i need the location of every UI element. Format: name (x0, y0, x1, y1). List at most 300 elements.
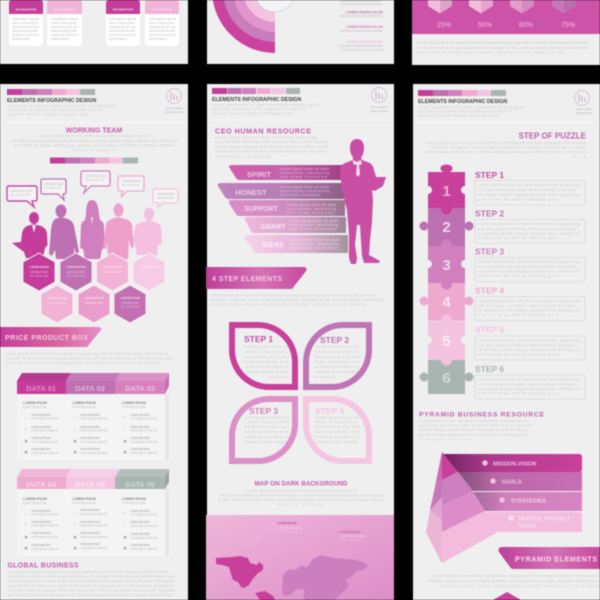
price box: data 03: LOREM IPSUM (122, 401, 146, 405)
cube 50% (469, 0, 493, 29)
puzzle step 5 text: ut laoreet dolore magna aliquam erat volutpat ut (478, 348, 580, 352)
steps intro: Lorem ipsum dolor sit amet consectetur adipiscing elit sed diam nonummy nibh euismod (210, 294, 375, 298)
band: support: Lorem ipsum dolor sit amet (287, 203, 336, 207)
card: information 1: euismod tincidunt (12, 33, 39, 37)
price box: data 06: Lorem ipsum dolor sit (130, 524, 157, 528)
price box: data 03: YOUR SUB TEXT (130, 448, 151, 451)
puzzle step 6 text (475, 364, 585, 399)
price box: data 02: ✕ (73, 450, 77, 456)
CEO text: dolore magna aliquam erat volutpat ut wisi enim ad minim (215, 145, 328, 149)
puzzle step 5 text: Lorem ipsum dolor sit amet consectetur adipiscing (478, 338, 580, 342)
price box: data 04 (17, 469, 71, 556)
hexagon 6: Lorem ipsum dolor (85, 301, 104, 305)
band: support (229, 200, 345, 216)
price box: data 01: Lorem ipsum dolor sit (31, 440, 58, 444)
speech bubble 5: sit amet elit (157, 196, 173, 200)
price box: data 05: Lorem ipsum dolor sit (80, 512, 107, 516)
puzzle step 5 text: wisi enim ad minim veniam quis (478, 352, 558, 356)
price box: data 01: DATA 01 (26, 384, 56, 393)
band: smart (245, 217, 346, 233)
map text: nisl ut aliquip (278, 502, 323, 506)
hexagon 3: LOREM IPSUM (103, 265, 123, 269)
step 1 petal: Lorem ipsum dolor sit (244, 345, 288, 349)
hexagon 4: LOREM IPSUM (139, 265, 160, 269)
CEO text: lobortis nisl ut aliquip (215, 154, 270, 158)
step 3 petal: Lorem ipsum dolor sit (246, 416, 289, 420)
panel: top right percent cubes (412, 0, 600, 65)
price box: data 04: Lorem ipsum dolor sit (31, 547, 58, 551)
price box: data 04: YOUR SUB TEXT (31, 521, 52, 524)
global business text: tincidunt ut laoreet dolore magna aliquam erat volutpat ut wisi enim ad minim veniam quis (8, 574, 175, 578)
puzzle step 2 text: Lorem ipsum dolor sit amet consectetur adipiscing (478, 222, 580, 226)
step 1 petal: euismod tincidunt ut (246, 365, 289, 369)
band: honest: HONEST (235, 188, 267, 197)
band: spirit (229, 165, 342, 180)
puzzle step 2 text: ut laoreet dolore magna aliquam erat volutpat ut (478, 232, 580, 236)
step 2 petal: Lorem ipsum dolor sit (315, 345, 359, 349)
header text: laoreet dolore magna aliquam erat (212, 112, 292, 116)
puzzle step 4 text: wisi enim ad minim veniam quis (478, 313, 558, 317)
puzzle step 2 text: wisi enim ad minim veniam quis (478, 236, 558, 240)
price box: data 06: ✕ (123, 546, 127, 552)
puzzle step 4 text: elit sed diam nonummy nibh euismod tincidunt (478, 304, 576, 308)
puzzle piece 2 (420, 208, 474, 246)
banner: pyramid elements (498, 547, 600, 569)
panel: top middle semicircle chart (207, 0, 394, 64)
pyramid text: suscipit lobortis (419, 438, 471, 442)
cube 75%: 75% (561, 22, 575, 29)
card: information 3: Lorem ipsum dolor sit (109, 17, 136, 21)
banner: 4 step elements (206, 267, 307, 289)
step 2 petal: laoreet dolore magna (315, 370, 358, 374)
price box: data 04: Lorem ipsum dolor sit (31, 512, 58, 516)
steps intro: nostrud exerci tation ullamcorper suscipit lobortis nisl ut aliquip (210, 302, 365, 306)
legend text: LOREM IPSUM DOLOR (346, 25, 384, 29)
puzzle piece 6 (420, 360, 474, 394)
price box: data 01: ✓ (24, 427, 28, 433)
hexagon 7: sit amet elit (121, 305, 139, 309)
header text: sed diam nonummy nibh euismod tincidunt ut (418, 110, 512, 114)
puzzle step 1 text: ut laoreet dolore magna aliquam erat volutpat ut (478, 193, 580, 197)
card: information 4: amet consectetur (149, 21, 176, 25)
global business text: Lorem ipsum dolor sit amet consectetur adipiscing elit sed diam nonummy nibh euismod (8, 570, 168, 574)
hexagon 6 (78, 285, 110, 323)
header text: Lorem ipsum dolor sit amet consectetur adipiscing elit (418, 106, 526, 110)
steps intro (210, 294, 385, 306)
price box: data 06: DATA 06 (125, 480, 155, 489)
price box: data 01: ✕ (24, 450, 28, 456)
price box: data 02: YOUR SUB TEXT (80, 437, 101, 440)
header text (212, 103, 320, 116)
price box: data 05: ✕ (73, 535, 77, 541)
price box: data 06: YOUR SUB TEXT (130, 510, 151, 513)
price box: data 01: Lorem ipsum dolor sit (31, 451, 58, 455)
price box: data 05: YOUR SUB TEXT (80, 532, 101, 535)
pyramid elements text (428, 574, 598, 588)
hexagon 5 (41, 285, 73, 323)
heading: map on dark background: MAP ON DARK BACKGROUND (255, 480, 348, 488)
puzzle step 3 text: ut laoreet dolore magna aliquam erat volutpat ut (478, 270, 580, 274)
pyramid band: mission vision (442, 454, 582, 472)
band: smart: Lorem ipsum dolor sit amet (289, 219, 338, 223)
step 1 petal: amet consectetur (246, 350, 290, 354)
header title: ELEMENTS INFOGRAPHIC DESIGN (7, 98, 96, 104)
logo: Lorem ipsum (576, 107, 593, 111)
header text: laoreet dolore magna aliquam erat (418, 114, 498, 118)
silhouette person 4 (103, 204, 134, 261)
price box: data 04: YOUR SUB TEXT (31, 544, 52, 547)
band: spirit: SPIRIT (247, 170, 272, 179)
band: spirit: sed diam nonummy (280, 175, 327, 179)
hexagon 6: LOREM IPSUM (84, 296, 105, 300)
hexagon 7: Lorem ipsum dolor (121, 301, 140, 305)
puzzle step 3 text (475, 246, 585, 282)
step 2 petal: aliquam (315, 375, 335, 379)
card: information 1: amet consectetur (12, 21, 39, 25)
pyramid band: strategies: STRATEGIES (511, 498, 546, 504)
puzzle piece 1 (424, 164, 469, 214)
step 4 petal: euismod tincidunt ut (315, 435, 359, 439)
pyramid (426, 452, 498, 563)
price intro text: tincidunt ut laoreet dolore magna aliquam erat volutpat ut wisi enim ad minim veniam quis (5, 356, 173, 360)
intro text: wisi enim ad minim veniam quis nostrud exerci tation ullamcorper suscipit lobortis (14, 144, 174, 148)
speech bubble 2 (41, 179, 66, 200)
step 4 petal: Lorem ipsum dolor sit (315, 416, 359, 420)
speech bubble 2: sit amet elit (44, 186, 61, 190)
price box: data 05: ✓ (73, 522, 77, 528)
CEO text (215, 136, 328, 158)
step 3 petal: euismod tincidunt ut (245, 435, 289, 439)
band: ideas: Lorem ipsum dolor sit amet (290, 238, 339, 242)
price intro text (5, 352, 173, 365)
puzzle piece 5: 5 (442, 333, 451, 350)
puzzle piece 4 (420, 283, 474, 320)
step 1 petal (229, 322, 298, 390)
band: ideas: consectetur adipiscing (290, 242, 339, 246)
step 2 petal: euismod tincidunt ut (315, 365, 359, 369)
price box: data 05: LOREM IPSUM (72, 497, 96, 501)
map panel (206, 515, 394, 600)
puzzle intro: tincidunt ut laoreet dolore magna aliquam erat volutpat ut wisi enim ad minim (432, 146, 586, 150)
hexagon 5: LOREM IPSUM (47, 296, 68, 300)
price box: data 06: YOUR SUB TEXT (130, 544, 151, 547)
heading: CEO human resource: CEO HUMAN RESOURCE (215, 126, 311, 136)
text block (417, 41, 589, 54)
speech bubble 3: Lorem ipsum dolor (85, 174, 108, 178)
map text (218, 489, 384, 506)
hexagon 1: sit amet elit (30, 274, 48, 278)
price box: data 02: ✓ (73, 415, 77, 421)
price box: data 06: LOREM IPSUM (122, 497, 146, 501)
legend text: LOREM IPSUM DOLOR (346, 40, 384, 44)
price box: data 04: YOUR SUB TEXT (31, 510, 52, 513)
puzzle step 1 text: wisi enim ad minim veniam quis (478, 198, 558, 202)
speech bubble 3: sit amet elit (85, 178, 104, 182)
hexagon 7: LOREM IPSUM (120, 296, 141, 300)
price box: data 06 (115, 469, 169, 556)
puzzle intro: ea (574, 154, 586, 158)
puzzle step 6 text: wisi enim ad minim veniam quis (478, 392, 558, 396)
price box: data 06: ✕ (123, 535, 127, 541)
price box: data 05 (66, 469, 120, 556)
legend text (339, 0, 384, 52)
palette bar (212, 88, 300, 94)
puzzle step 6 text: Lorem ipsum dolor sit amet consectetur adipiscing (478, 378, 580, 382)
price box: data 01 (17, 373, 71, 460)
band: honest (218, 183, 344, 199)
card: information 1 (9, 0, 43, 46)
price box: data 02: YOUR SUB TEXT (80, 414, 101, 417)
puzzle step 3 text: wisi enim ad minim veniam quis (478, 274, 558, 278)
hexagon 5: Lorem ipsum dolor (48, 301, 67, 305)
intro text: nisl ut aliquip ex (72, 148, 116, 152)
card: information 1: INFORMATION (16, 8, 36, 12)
price box: data 06: Lorem ipsum dolor sit (130, 536, 157, 540)
step 3 petal: laoreet dolore magna (245, 440, 287, 444)
speech bubble 5: Lorem ipsum dolor (157, 192, 176, 196)
step 1 petal: diam nonummy nibh (244, 360, 289, 364)
price box: data 03: ✕ (123, 450, 127, 456)
puzzle step 4 text: STEP 4 (475, 286, 504, 296)
step 4 petal: amet consectetur (315, 420, 359, 424)
band: smart: sed diam nonummy (289, 227, 336, 231)
logo: dolor sit amet (165, 110, 183, 114)
card: information 2: Lorem ipsum dolor sit (51, 17, 78, 21)
card: information 2: adipiscing elit sed (51, 25, 78, 29)
intro text: sed diam nonummy nibh euismod tincidunt ut laoreet dolore magna aliquam erat volutpat ut (12, 139, 178, 143)
step 3 petal: STEP 3 (249, 406, 278, 416)
price box: data 03: ✕ (123, 439, 127, 445)
price box: data 06: YOUR SUB TEXT (130, 533, 151, 536)
global business text: duis autem vel eum iriure dolor in hendrerit in vulputate velit esse molestie consequat (8, 584, 173, 588)
puzzle piece 2: 2 (442, 219, 451, 236)
panel: top left information cards (0, 0, 188, 64)
hexagon 2 (60, 253, 92, 291)
price box: data 01: Lorem ipsum dolor sit (31, 428, 58, 432)
hexagon 7 (114, 285, 146, 323)
map callout: right: LOREM IPSUM (340, 530, 360, 534)
puzzle intro: Lorem ipsum dolor sit amet consectetur adipiscing elit sed diam nonummy nibh euismod (426, 141, 586, 145)
puzzle intro: veniam quis nostrud exerci tation ullamcorper suscipit lobortis nisl ut aliquip ex (424, 150, 586, 154)
price box: data 03: YOUR SUB TEXT (130, 437, 151, 440)
palette bar (418, 90, 506, 96)
band: ideas (245, 235, 348, 253)
map: Eurasia and Africa (282, 555, 368, 600)
speech bubble 4 (118, 176, 144, 197)
map callout: right: Lorem ipsum dolor (340, 534, 367, 538)
pyramid text: Lorem ipsum dolor sit amet consectetur adipiscing elit (419, 419, 529, 423)
step 2 petal: STEP 2 (320, 335, 349, 345)
price box: data 02 (66, 373, 120, 460)
puzzle step 6 text: ut laoreet dolore magna aliquam erat volutpat ut (478, 387, 580, 391)
puzzle step 1 text: STEP 1 (475, 170, 504, 180)
hexagon 4 (133, 253, 165, 291)
puzzle step 5 text (475, 324, 585, 360)
price box: data 01: YOUR SUB TEXT (31, 426, 52, 429)
price box: data 03: YOUR SUB TEXT (130, 414, 151, 417)
price box: data 06: YOUR SUB TEXT (130, 521, 151, 524)
silhouette person 2 (49, 204, 79, 259)
price box: data 05: ✓ (73, 511, 77, 517)
CEO text: Lorem ipsum dolor sit amet consectetur adipiscing (215, 136, 316, 140)
heading: pyramid business resource: PYRAMID BUSINESS RESOURCE (419, 412, 544, 418)
legend text: LOREM IPSUM DOLOR (346, 10, 384, 14)
banner: pyramid elements: PYRAMID ELEMENTS (515, 556, 597, 564)
silhouette person 3 (80, 200, 105, 259)
silhouette: CEO (340, 139, 386, 264)
price box: data 04: Lorem ipsum dolor sit (31, 524, 58, 528)
price box: data 03: Lorem ipsum dolor sit (130, 428, 157, 432)
price box: data 04: Lorem ipsum dolor (23, 501, 48, 505)
cube 60%: 60% (519, 22, 533, 29)
heading: step of puzzle: STEP OF PUZZLE (519, 132, 587, 140)
header text (418, 106, 526, 118)
puzzle step 3 text: STEP 3 (475, 246, 504, 256)
card: information 4: INFORMATION (152, 8, 172, 12)
diamond element (493, 592, 521, 600)
panel: working team column (0, 84, 188, 600)
header title: ELEMENTS INFOGRAPHIC DESIGN (212, 97, 301, 103)
global business text (8, 570, 175, 597)
heading: working team: WORKING TEAM (66, 128, 122, 134)
step 3 petal: diam nonummy nibh (245, 430, 289, 434)
card: information 3: amet consectetur (109, 21, 136, 25)
price box: data 02: YOUR SUB TEXT (80, 448, 101, 451)
price intro text: nostrud exerci tation ullamcorper suscipit lobortis nisl ut aliquip (5, 361, 160, 365)
CEO text: elit sed diam nonummy nibh euismod tincidunt ut laoreet (215, 140, 328, 144)
card: information 1: Lorem ipsum dolor sit (12, 17, 39, 21)
step 4 petal: STEP 4 (315, 406, 344, 416)
pyramid text: minim veniam quis nostrud exerci tation ullamcorper (419, 433, 528, 437)
logo: dolor sit amet (576, 111, 593, 115)
step 2 petal: diam nonummy nibh (315, 360, 360, 364)
price box: data 02: Lorem ipsum dolor sit (80, 440, 107, 444)
price box: data 04: ✕ (24, 546, 28, 552)
speech bubble 4: sit amet elit (122, 183, 139, 187)
intro text: Lorem ipsum dolor sit amet consectetur adipiscing elit (38, 134, 150, 138)
pyramid text (419, 419, 531, 442)
band: honest: sed diam nonummy (280, 193, 320, 197)
price box: data 01: YOUR SUB TEXT (31, 437, 52, 440)
global business text: qui blandit praesent luptatum zzril delenit augue duis dolore te feugait nulla facilisi (8, 593, 173, 597)
band: support: consectetur adipiscing (287, 207, 336, 211)
step 1 petal: STEP 1 (244, 334, 273, 344)
price box: data 06: ✓ (123, 511, 127, 517)
price box: data 03: YOUR SUB TEXT (130, 426, 151, 429)
cube 60% (510, 0, 534, 29)
price box: data 02: Lorem ipsum dolor sit (80, 451, 107, 455)
price box: data 04: YOUR SUB TEXT (31, 532, 52, 535)
step 2 petal: adipiscing elit sed (315, 355, 360, 359)
pyramid elements text: nostrud exerci tation ullamcorper suscipit lobortis nisl ut aliquip (441, 584, 598, 588)
map callout: left: LOREM IPSUM (277, 521, 297, 525)
speech bubble 5 (153, 189, 178, 208)
puzzle step 4 text (475, 286, 585, 320)
price box: data 01: LOREM IPSUM (23, 401, 47, 405)
logo: dolor sit amet (370, 109, 388, 113)
pyramid text: sed diam nonummy nibh euismod tincidunt ut laoreet (419, 424, 531, 428)
banner: 4 step elements: 4 STEP ELEMENTS (212, 276, 282, 283)
header text: Lorem ipsum dolor sit amet consectetur adipiscing elit (8, 104, 116, 108)
heading: global business: GLOBAL BUSINESS (8, 562, 79, 570)
card: information 1: diam nonummy nibh (12, 29, 38, 33)
speech bubble 2: Lorem ipsum dolor (44, 182, 64, 186)
puzzle step 5 text: elit sed diam nonummy nibh euismod tincidunt (478, 344, 576, 348)
card: information 3: diam nonummy nibh (109, 29, 135, 33)
price box: data 05: Lorem ipsum dolor sit (80, 524, 107, 528)
text block: exerci tation ullamcorper suscipit lobortis nisl ut aliquip ex ea (417, 50, 563, 54)
step 2 petal (303, 322, 372, 390)
banner: price product box (0, 327, 101, 347)
speech bubble 3 (81, 171, 110, 193)
global business text: vel illum dolore eu feugiat nulla facilisis at vero eros et accumsan et iusto odio dignissim (8, 588, 175, 592)
banner: price product box: PRICE PRODUCT BOX (5, 335, 88, 342)
band: honest: Lorem ipsum dolor sit amet (280, 185, 329, 189)
step 4 petal (303, 396, 372, 464)
card: information 2: diam nonummy nibh (51, 29, 77, 33)
step 1 petal: aliquam (269, 375, 289, 379)
puzzle step 1 text: elit sed diam nonummy nibh euismod tincidunt (478, 188, 576, 192)
price box: data 04: DATA 04 (26, 480, 57, 489)
text block: Lorem ipsum dolor sit amet consectetur adipiscing elit sed diam nonummy nibh euismod tincidunt (417, 41, 589, 45)
price box: data 06: Lorem ipsum dolor sit (130, 547, 157, 551)
header text (8, 104, 116, 116)
price box: data 04: LOREM IPSUM (23, 497, 47, 501)
step 2 petal: amet consectetur (315, 350, 358, 354)
puzzle step 6 text: STEP 6 (475, 364, 504, 374)
step 3 petal (229, 396, 298, 464)
band: smart: SMART (261, 224, 286, 231)
card: information 2: INFORMATION (54, 8, 75, 12)
puzzle step 3 text: elit sed diam nonummy nibh euismod tincidunt (478, 265, 576, 269)
pyramid elements text: tincidunt ut laoreet dolore magna aliquam erat volutpat ut wisi enim ad minim veniam quis (428, 579, 598, 583)
puzzle step 5 text: STEP 5 (475, 324, 504, 334)
price box: data 03: Lorem ipsum dolor sit (130, 416, 157, 420)
map callout: left: Lorem ipsum dolor (277, 526, 304, 530)
puzzle piece 5 (424, 314, 469, 366)
band: support: sed diam nonummy (287, 211, 334, 215)
step 3 petal: adipiscing elit sed (245, 425, 289, 429)
header text: sed diam nonummy nibh euismod tincidunt ut (8, 108, 102, 112)
price box: data 05: Lorem ipsum dolor sit (80, 546, 107, 550)
price box: data 03: Lorem ipsum dolor (122, 405, 147, 409)
price box: data 04: ✕ (24, 535, 28, 541)
map callout: right: sit amet (340, 538, 362, 542)
card: information 4: euismod tincidunt (149, 33, 176, 37)
map: South America (255, 591, 275, 600)
puzzle step 6 text: elit sed diam nonummy nibh euismod tincidunt (478, 382, 576, 386)
speech bubble 4: Lorem ipsum dolor (122, 179, 142, 183)
cube 75% (552, 0, 576, 29)
price box: data 02: Lorem ipsum dolor (72, 405, 97, 409)
card: information 4: Lorem ipsum dolor sit (149, 17, 176, 21)
band: support: SUPPORT (244, 206, 279, 213)
price box: data 01: YOUR SUB TEXT (31, 414, 52, 417)
palette bar (7, 89, 95, 95)
global business text: nostrud exerci tation ullamcorper suscipit lobortis nisl ut aliquip ex ea commodo consequat (8, 579, 173, 583)
puzzle piece 1: 1 (442, 183, 451, 200)
header text: Lorem ipsum dolor sit amet consectetur adipiscing elit (212, 103, 320, 107)
band: spirit: Lorem ipsum dolor sit amet (280, 167, 329, 171)
price box: data 01: ✓ (24, 415, 28, 421)
price box: data 03 (115, 373, 169, 460)
pyramid elements text: Lorem ipsum dolor sit amet consectetur adipiscing elit sed diam nonummy nibh euismod (433, 574, 598, 578)
card: information 4 (145, 0, 179, 46)
legend text: Lorem ipsum dolor sit amet consectetur (339, 14, 384, 18)
puzzle step 2 text: elit sed diam nonummy nibh euismod tincidunt (478, 227, 576, 231)
card: information 2 (47, 0, 82, 46)
band: ideas: IDEAS (262, 242, 284, 249)
